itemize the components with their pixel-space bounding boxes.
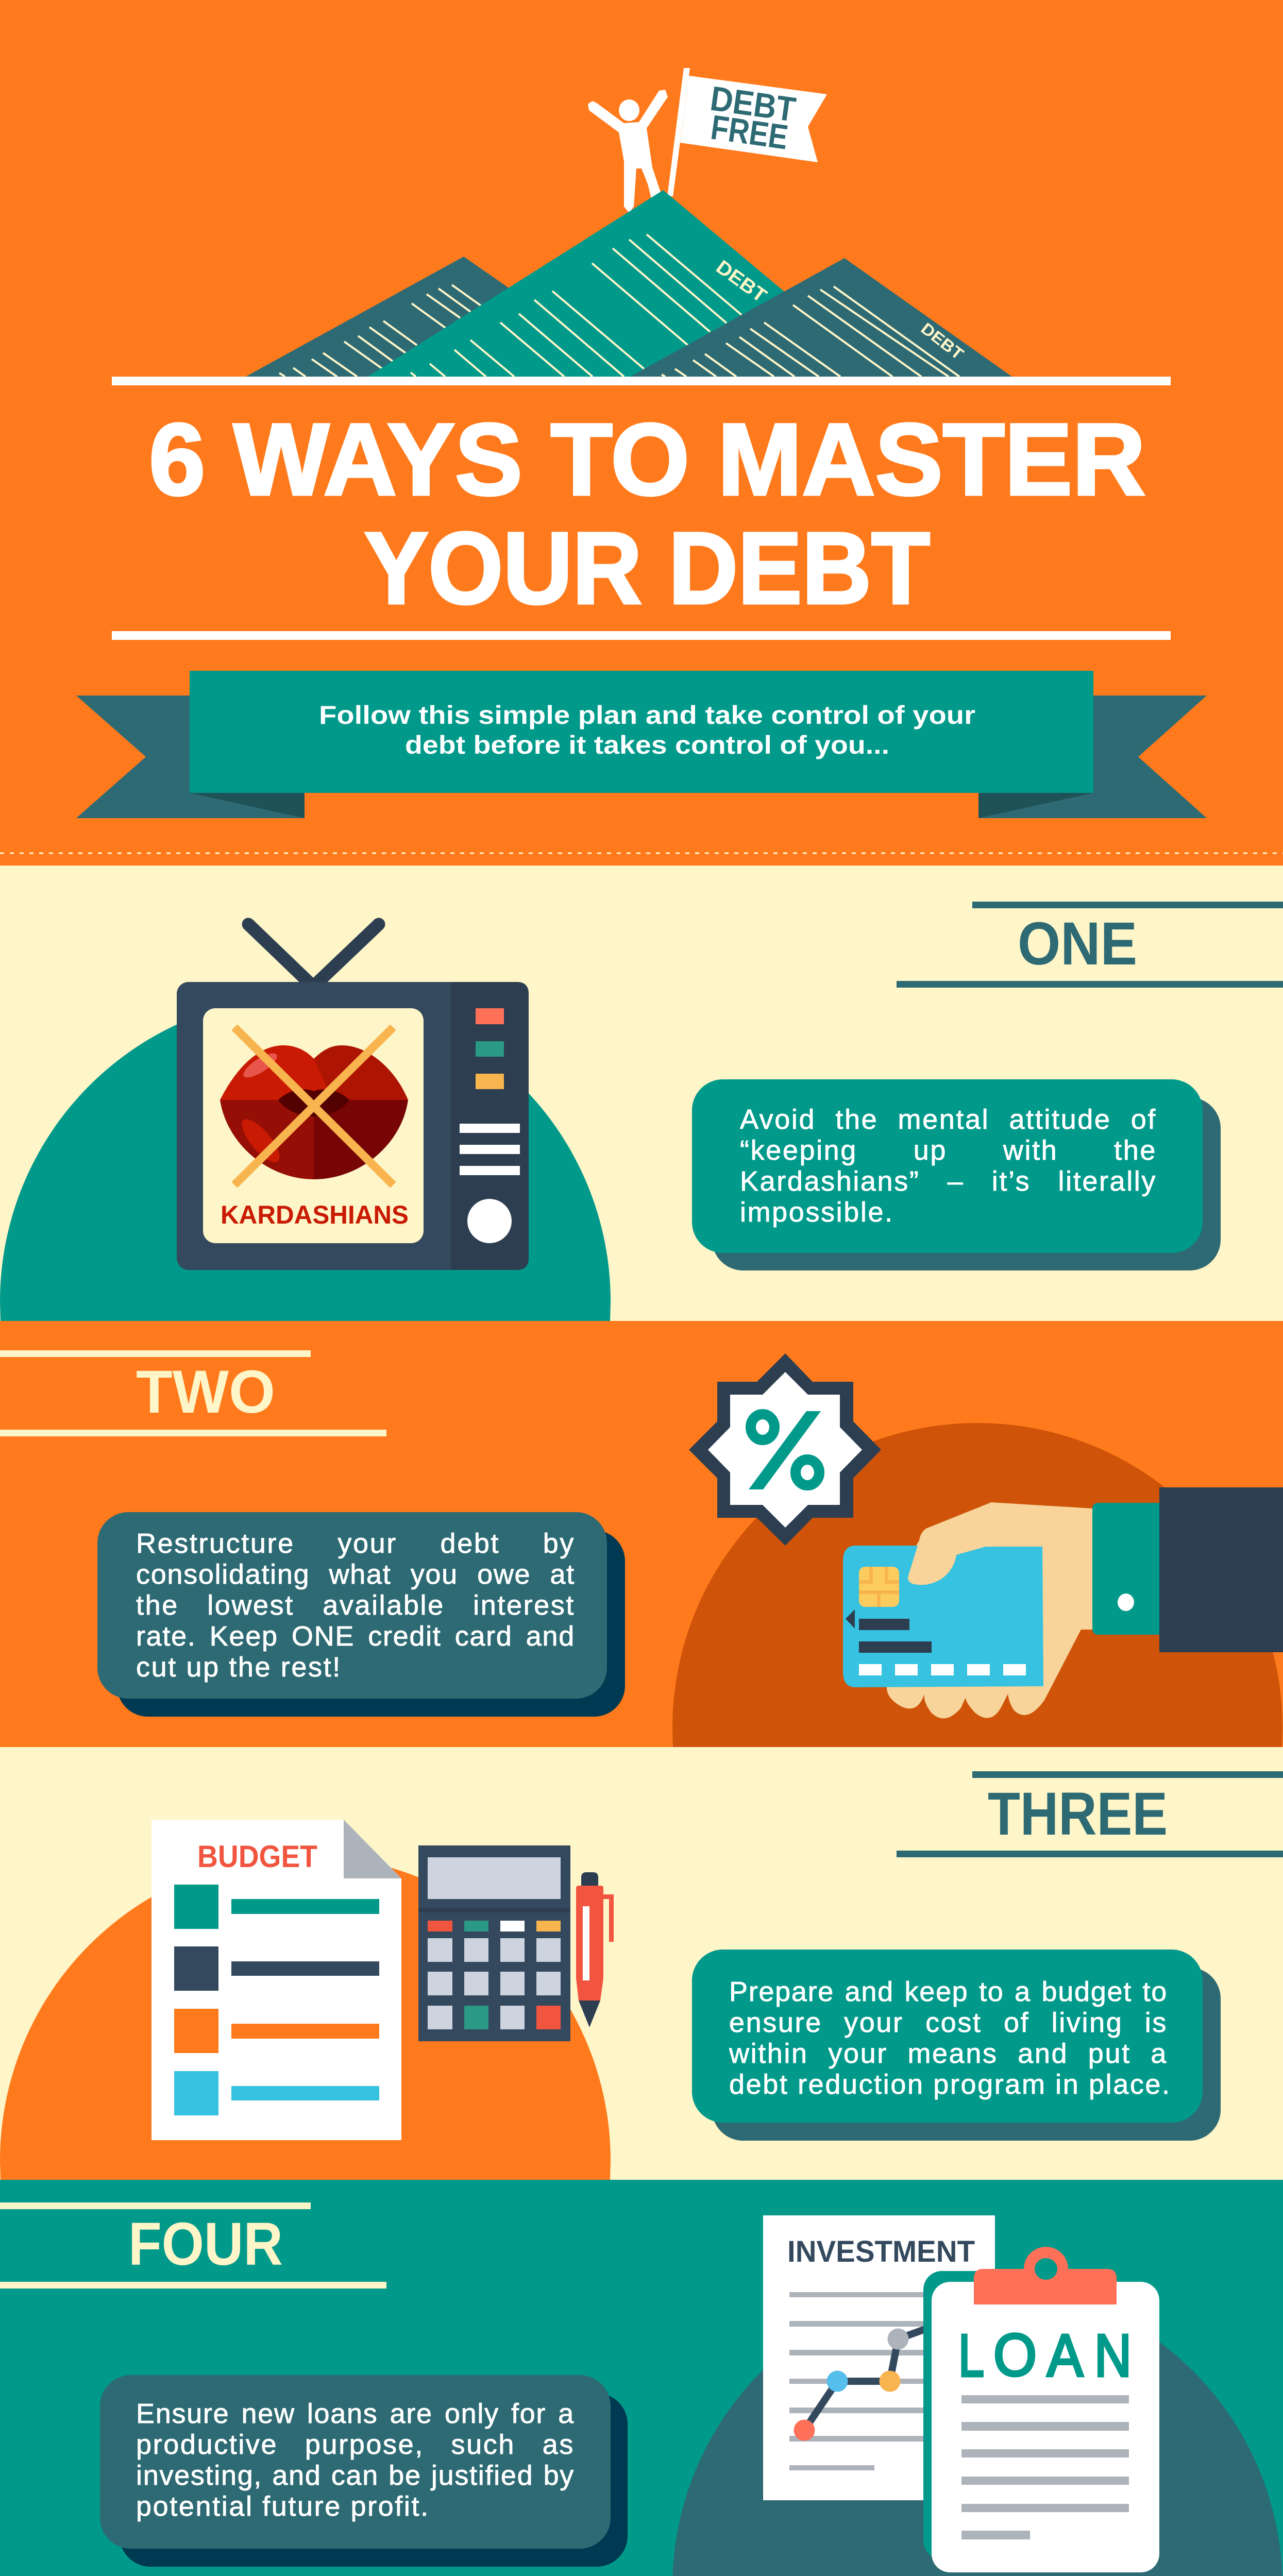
title [149,402,1145,625]
callout: step four text [100,2375,628,2567]
title: 6 WAYS TO MASTER [149,402,1145,516]
callout: step two text: the lowest available interest [136,1590,575,1621]
icon: loan clipboard: L [958,2322,984,2389]
callout: step one text: “keeping up with the [740,1135,1157,1166]
icon: loan clipboard: A [1047,2322,1084,2389]
icon: debt paper mountains: DEBT [918,319,967,364]
callout: step two text: rate. Keep ONE credit card and [136,1621,575,1652]
callout: step two text: cut up the rest! [136,1652,342,1683]
icon: budget sheet [151,1820,401,2140]
callout: step three text: ensure your cost of living is [729,2007,1168,2038]
icon: television with crossed-out lips [177,924,529,1270]
heading: TWO: TWO [136,1358,275,1426]
heading: ONE [897,902,1283,988]
banner ribbon with subtitle: Follow this simple plan and take control of your [319,701,975,730]
callout: step two text: consolidating what you owe at [136,1559,575,1590]
heading: FOUR [0,2202,386,2289]
icon: pen [576,1872,614,2027]
icon: person with debt free flag: DEBT [708,79,798,129]
panel: step two [0,1321,1283,1747]
icon: hand holding credit card [843,1487,1283,1718]
callout: step one text: Kardashians” – it’s literally [740,1166,1157,1197]
callout: step four text: investing, and can be justified by [136,2460,575,2491]
icon: debt paper mountains [246,190,1012,377]
callout: step four text: Ensure new loans are only for a [136,2398,575,2429]
icon: television with crossed-out lips: KARDASHIANS [221,1200,409,1229]
icon: investment sheet with line chart: INVESTMENT [787,2235,975,2268]
callout: step four text: potential future profit. [136,2491,430,2522]
title: YOUR DEBT [364,511,930,625]
panel: step four [0,2180,1283,2576]
callout: step two text [97,1512,625,1717]
icon: person with debt free flag: FREE [708,108,790,157]
callout: step one text: impossible. [740,1197,894,1228]
callout: step two text: Restructure your debt by [136,1528,575,1559]
banner ribbon with subtitle [76,671,1207,818]
icon: loan clipboard: N [1094,2322,1132,2389]
callout: step three text: debt reduction program in place. [729,2069,1171,2100]
icon: person with debt free flag [588,68,827,213]
icon: debt paper mountains: DEBT [712,256,770,307]
icon: investment sheet with line chart [763,2215,995,2500]
heading: THREE [897,1771,1283,1857]
icon: percent badge [689,1353,881,1546]
icon: loan clipboard: O [993,2321,1037,2388]
heading: THREE: THREE [988,1780,1168,1848]
callout: step three text: within your means and put a [729,2038,1168,2069]
banner ribbon with subtitle: debt before it takes control of you... [405,731,889,759]
callout: step three text [692,1950,1221,2141]
callout: step one text: Avoid the mental attitude of [740,1104,1157,1135]
heading: FOUR: FOUR [128,2210,283,2278]
heading: ONE: ONE [1018,910,1137,978]
callout: step four text: productive purpose, such as [136,2429,575,2460]
callout: step three text: Prepare and keep to a budget to [729,1976,1168,2007]
panel: step one [0,866,1283,1321]
icon: calculator [418,1845,570,2041]
panel: hero header [0,0,1283,866]
icon: loan clipboard [923,2247,1159,2572]
callout: step one text [692,1079,1221,1270]
heading: TWO [0,1350,386,1436]
panel: step three [0,1747,1283,2180]
icon: budget sheet: BUDGET [197,1839,317,1874]
